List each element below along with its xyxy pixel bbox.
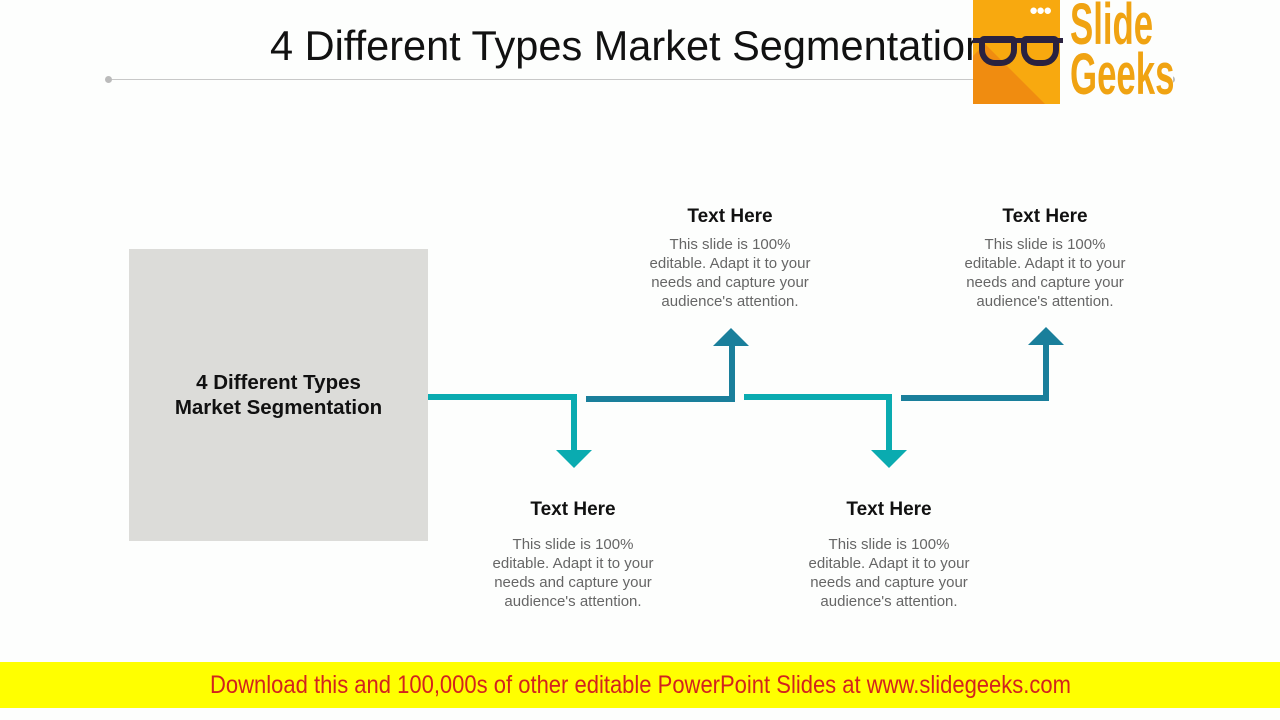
arrow 2 up [586, 328, 749, 402]
arrow 4 up [901, 327, 1064, 401]
text block 4: This slide is 100% editable. Adapt it to your needs and capture your audience's attention. [965, 236, 1125, 310]
box heading: Market Segmentation [175, 396, 382, 419]
title: 4 Different Types Market Segmentation [270, 22, 988, 69]
text block 3 [809, 499, 970, 610]
text block 1: This slide is 100% editable. Adapt it to your needs and capture your audience's attention. [493, 536, 653, 610]
logo [973, 0, 1173, 104]
text block 2: This slide is 100% editable. Adapt it to your needs and capture your audience's attention. [650, 236, 810, 310]
arrow 1 down [428, 394, 592, 468]
panel: main box [129, 249, 428, 541]
text block 4: Text Here [1002, 206, 1088, 227]
arrow 3 down [744, 394, 907, 468]
box heading: 4 Different Types [196, 371, 361, 394]
title underline [108, 79, 1172, 80]
box heading [175, 371, 382, 419]
footer banner [0, 662, 1280, 708]
text block 3: This slide is 100% editable. Adapt it to your needs and capture your audience's attention. [809, 536, 969, 610]
logo: Geeks [1070, 42, 1174, 107]
footer banner: Download this and 100,000s of other editable PowerPoint Slides at www.slidegeeks.com [210, 671, 1071, 699]
text block 1 [493, 499, 654, 610]
text block 3: Text Here [846, 499, 932, 520]
text block 2: Text Here [687, 206, 773, 227]
text block 1: Text Here [530, 499, 616, 520]
glasses [979, 36, 1017, 66]
logo: ●●● [1029, 2, 1050, 19]
